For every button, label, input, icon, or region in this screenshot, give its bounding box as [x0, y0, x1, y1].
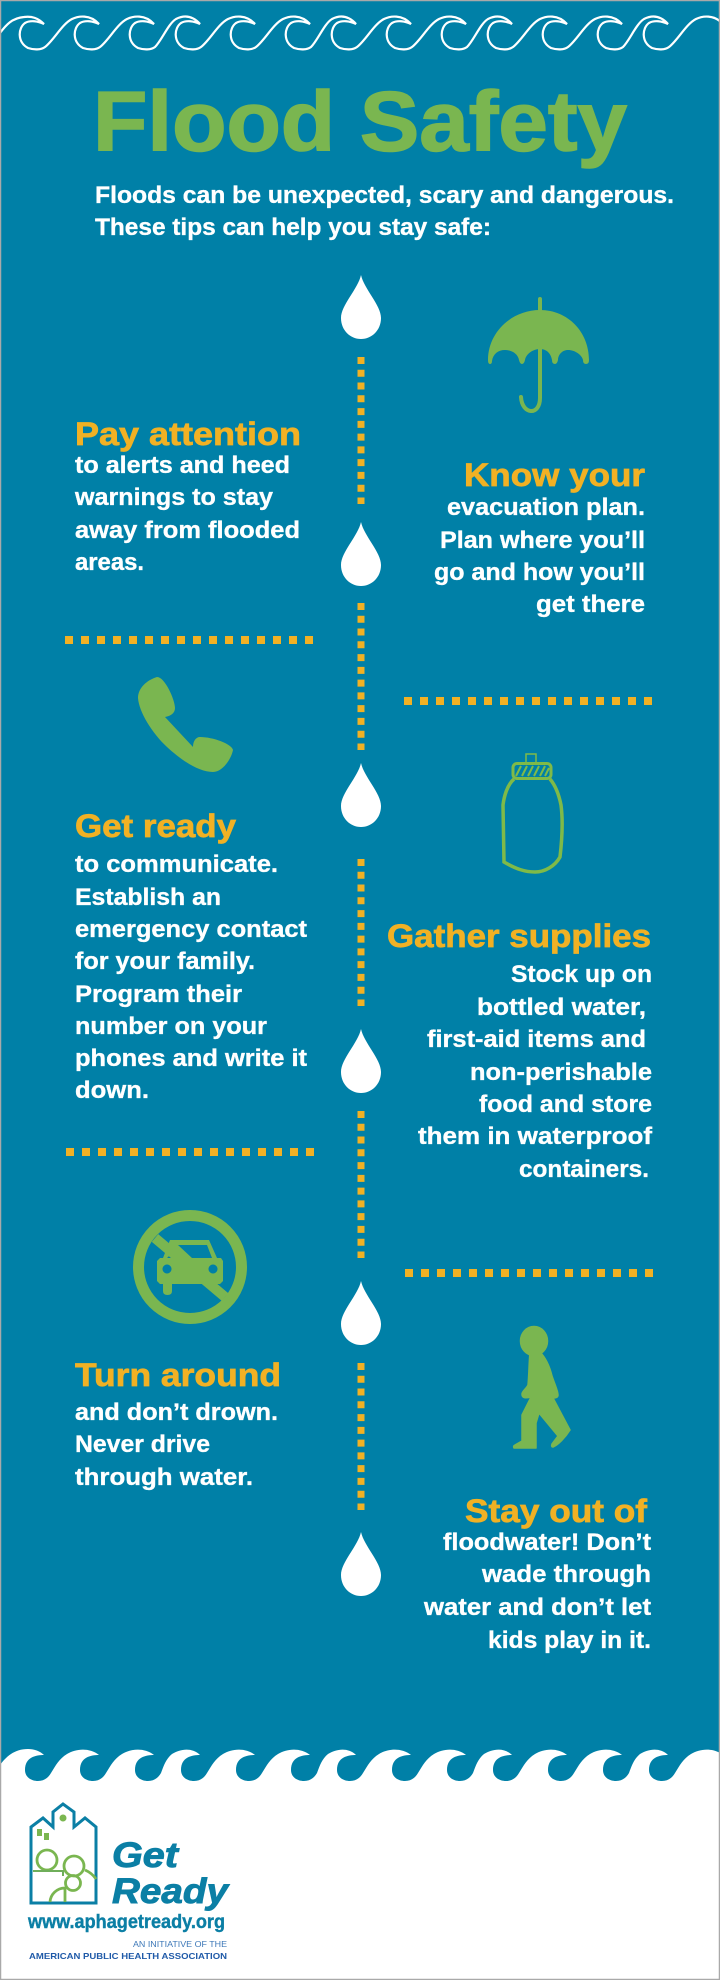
- tip: get ready: down.: [75, 1077, 149, 1104]
- tip: know your: [434, 457, 645, 618]
- timeline: dotted line 4: [358, 1111, 364, 1258]
- divider right 1: [404, 697, 652, 705]
- title: Flood Safety: [93, 74, 627, 168]
- tip: know your: evacuation plan.: [447, 494, 645, 521]
- tip: get ready: phones and write it: [75, 1045, 307, 1072]
- logo: initiative line: [29, 1939, 227, 1961]
- timeline: dotted line 1: [358, 357, 364, 504]
- tip: pay attention: Pay attention: [75, 416, 301, 452]
- intro text: [95, 182, 674, 241]
- timeline: dotted line 3: [358, 859, 364, 1006]
- timeline: dotted line 5: [358, 1363, 364, 1510]
- timeline: water drop 2: [341, 522, 381, 586]
- tip: know your: Plan where you’ll: [440, 527, 645, 554]
- timeline: water drop 5: [341, 1281, 381, 1345]
- icon: phone: [138, 677, 233, 772]
- timeline: water drop 3: [341, 763, 381, 827]
- icon: no driving: [138, 1216, 242, 1318]
- divider left 1: [65, 636, 313, 644]
- tip: pay attention: away from flooded: [75, 517, 300, 544]
- wave border top: [0, 17, 720, 49]
- intro text: These tips can help you stay safe:: [95, 214, 491, 241]
- tip: gather supplies: containers.: [519, 1156, 649, 1183]
- tip: turn around: Never drive: [75, 1431, 210, 1458]
- tip: get ready: for your family.: [75, 948, 255, 975]
- intro text: Floods can be unexpected, scary and dangerous.: [95, 182, 674, 209]
- tip: stay out of: floodwater! Don’t: [443, 1529, 651, 1556]
- tip: pay attention: warnings to stay: [74, 484, 274, 511]
- logo: house with family: [31, 1804, 96, 1903]
- tip: gather supplies: first-aid items and: [427, 1026, 646, 1053]
- tip: know your: Know your: [464, 457, 645, 493]
- tip: stay out of: Stay out of: [465, 1493, 647, 1529]
- tip: gather supplies: them in waterproof: [418, 1123, 653, 1150]
- tip: gather supplies: bottled water,: [477, 994, 646, 1021]
- timeline: water drop 6: [341, 1532, 381, 1596]
- logo: website url: www.aphagetready.org: [27, 1912, 225, 1933]
- icon: water bottle: [503, 754, 562, 872]
- tip: gather supplies: food and store: [479, 1091, 652, 1118]
- tip: get ready: [75, 808, 307, 1104]
- logo: get ready wordmark: Get: [112, 1836, 180, 1875]
- divider left 2: [66, 1148, 314, 1156]
- tip: stay out of: water and don’t let: [423, 1594, 651, 1621]
- divider right 2: [405, 1269, 653, 1277]
- tip: gather supplies: Stock up on: [511, 961, 652, 988]
- tip: turn around: and don’t drown.: [75, 1399, 278, 1426]
- tip: get ready: Program their: [75, 981, 242, 1008]
- logo: get ready wordmark: [112, 1836, 230, 1911]
- tip: know your: go and how you’ll: [434, 559, 645, 586]
- logo: initiative line: AN INITIATIVE OF THE: [133, 1939, 227, 1949]
- logo: get ready wordmark: Ready: [112, 1872, 230, 1911]
- timeline: dotted line 2: [358, 603, 364, 750]
- tip: turn around: through water.: [75, 1464, 253, 1491]
- timeline: water drop 4: [341, 1029, 381, 1093]
- tip: know your: get there: [536, 591, 645, 618]
- tip: stay out of: [423, 1493, 651, 1654]
- tip: get ready: Establish an: [75, 884, 221, 911]
- icon: walking child: [514, 1326, 570, 1448]
- tip: gather supplies: Gather supplies: [387, 918, 651, 954]
- icon: umbrella: [488, 299, 589, 411]
- tip: get ready: emergency contact: [75, 916, 307, 943]
- logo: initiative line: AMERICAN PUBLIC HEALTH ASSOCIATION: [29, 1951, 227, 1961]
- tip: turn around: [75, 1357, 281, 1491]
- tip: gather supplies: non-perishable: [470, 1059, 652, 1086]
- timeline: water drop 1: [341, 275, 381, 339]
- tip: pay attention: areas.: [75, 549, 144, 576]
- tip: stay out of: wade through: [481, 1561, 651, 1588]
- tip: stay out of: kids play in it.: [488, 1627, 651, 1654]
- tip: pay attention: to alerts and heed: [75, 452, 290, 479]
- tip: turn around: Turn around: [75, 1357, 281, 1393]
- tip: get ready: to communicate.: [75, 851, 278, 878]
- tip: pay attention: [74, 416, 301, 576]
- tip: gather supplies: [387, 918, 653, 1183]
- tip: get ready: Get ready: [75, 808, 236, 844]
- tip: get ready: number on your: [75, 1013, 267, 1040]
- footer: white wave panel: [0, 1749, 720, 1980]
